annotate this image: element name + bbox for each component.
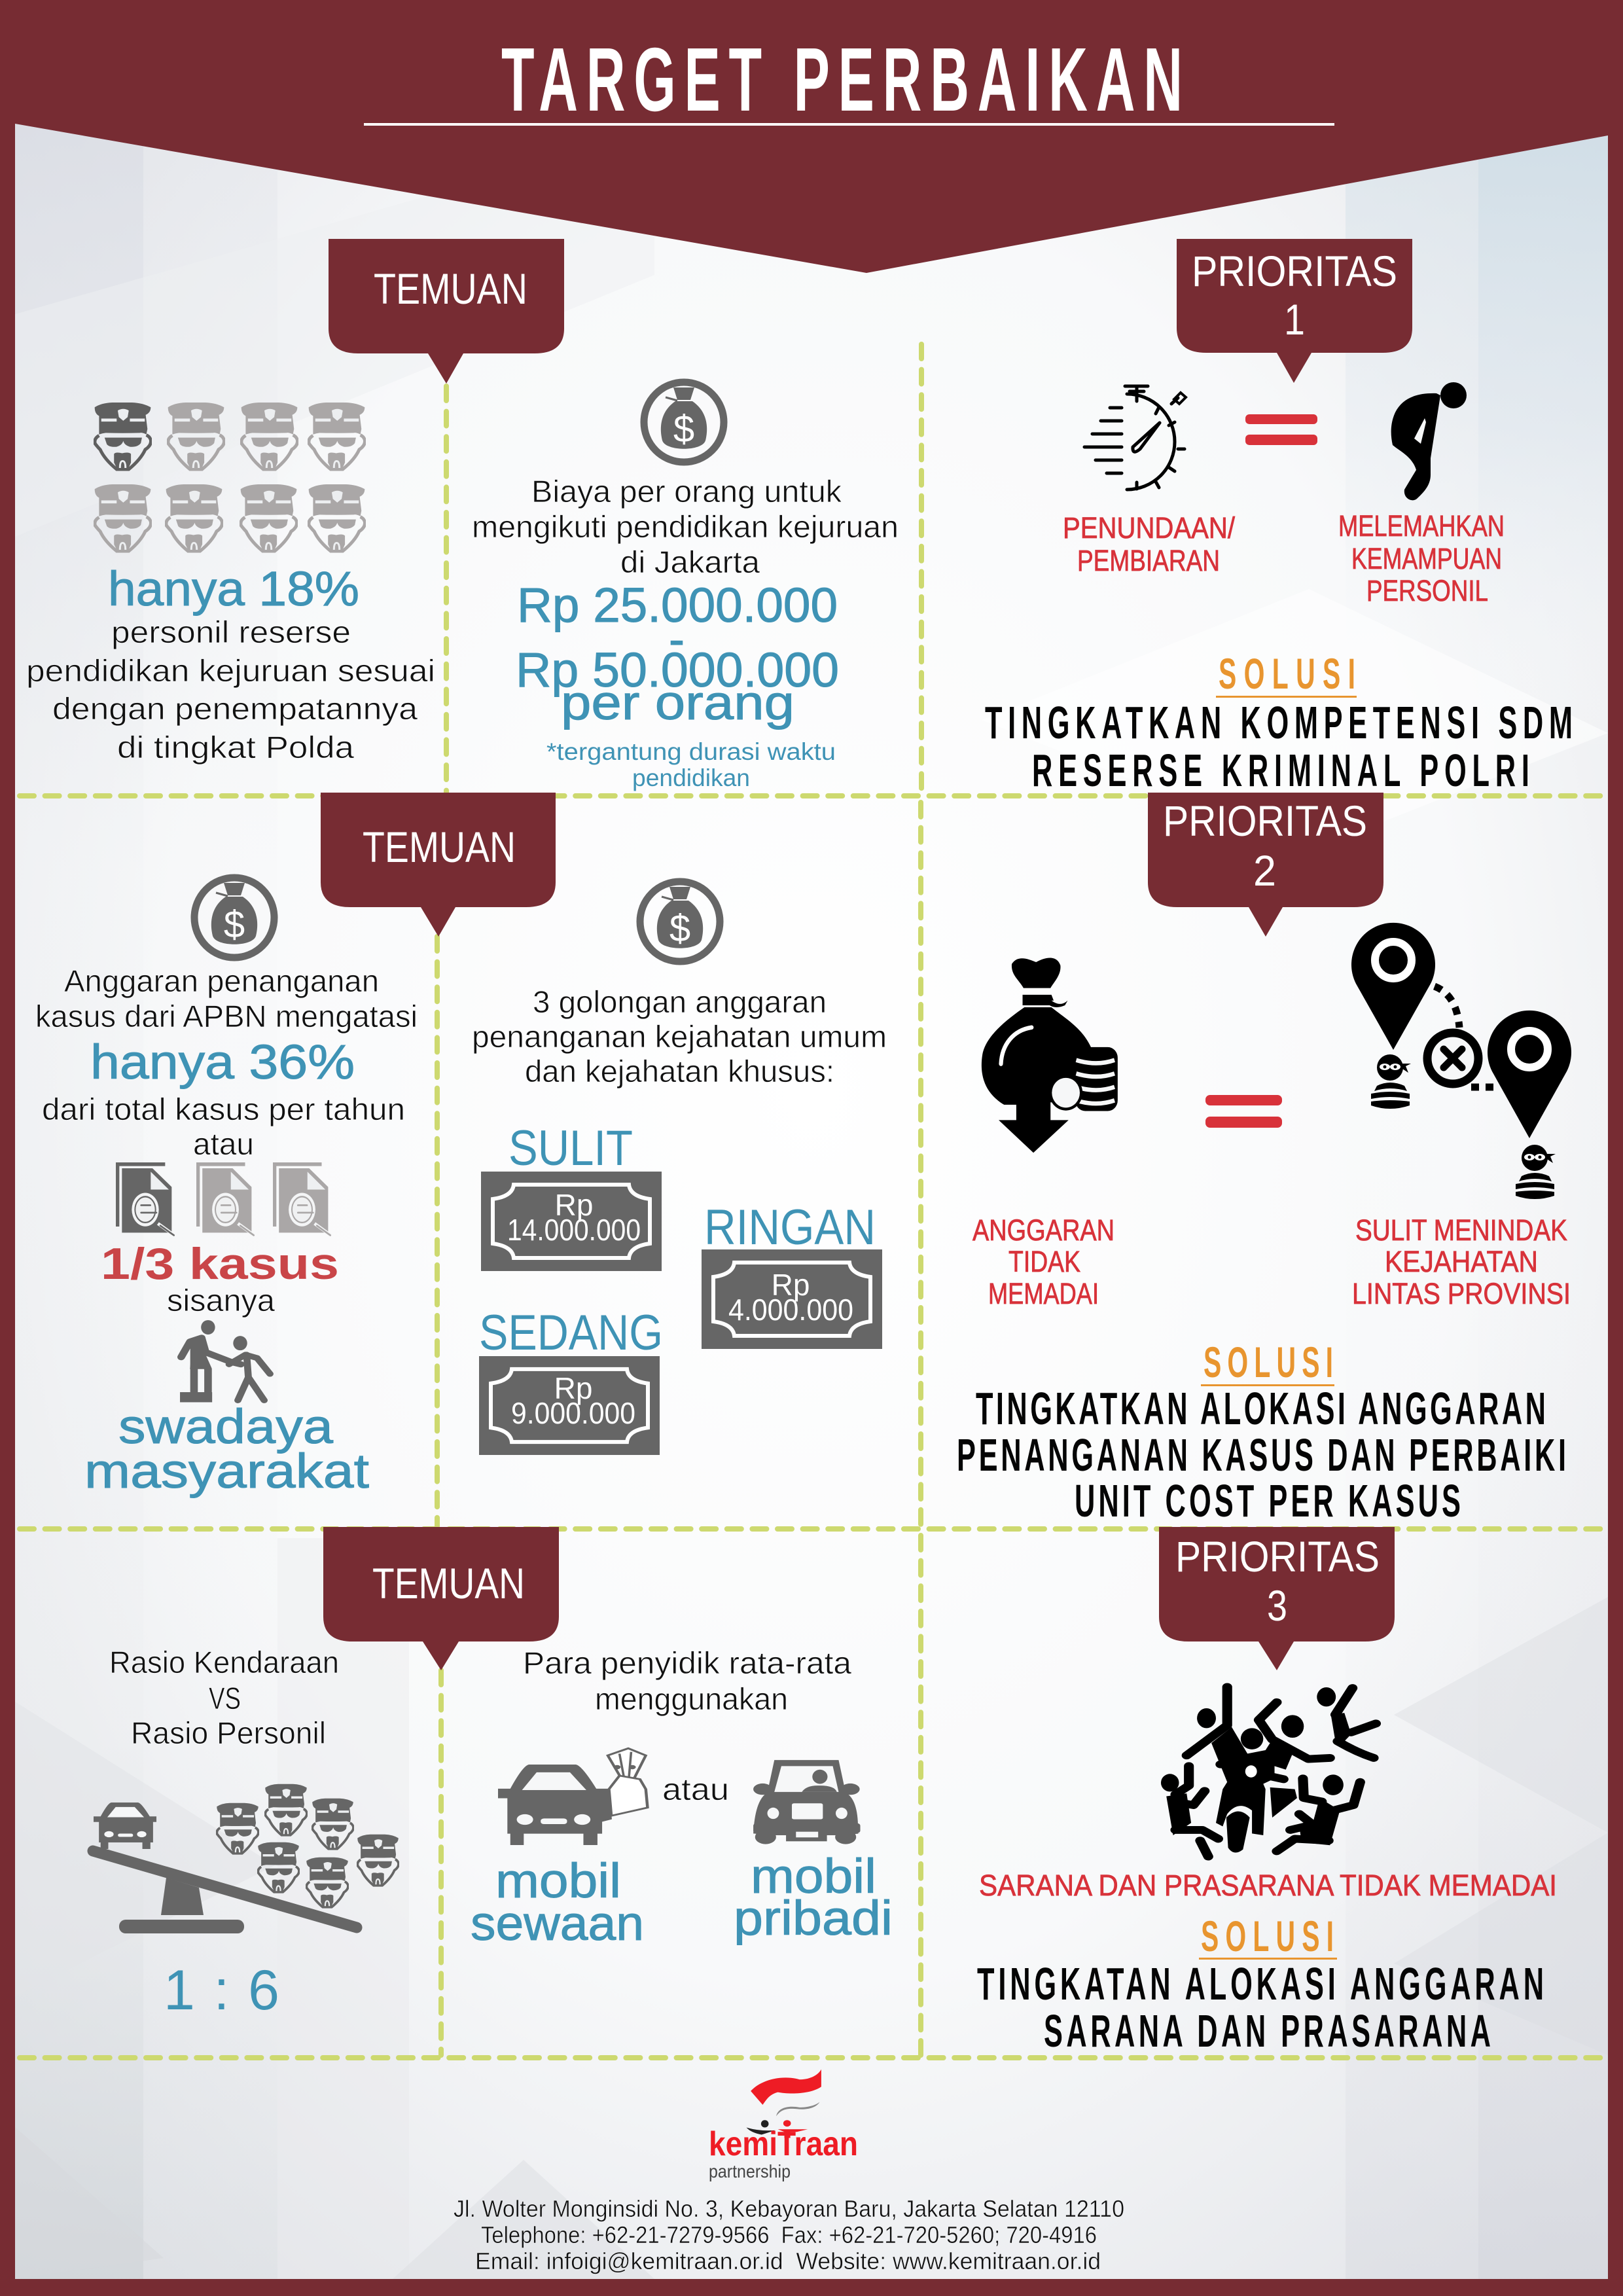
stat: cost range: Rp 25.000.000	[517, 578, 838, 632]
heading: solusi 2: SOLUSI	[1204, 1338, 1333, 1386]
text block: solusi 2: TINGKATKAN ALOKASI ANGGARAN	[976, 1383, 1546, 1435]
text block: solusi 2: UNIT COST PER KASUS	[1075, 1475, 1461, 1527]
budget: ringan: RINGAN	[704, 1200, 876, 1255]
heading: prioritas 3	[1159, 1527, 1395, 1670]
icon: money bag	[644, 382, 724, 462]
stat: hanya 36%: hanya 36%	[90, 1035, 355, 1089]
text block: 3 golongan: dan kejahatan khusus:	[525, 1054, 834, 1088]
text block: solusi 1	[985, 697, 1573, 797]
footer: contact information: Telephone: +62-21-7279-9566 Fax: +62-21-720-5260; 720-4916	[481, 2221, 1097, 2248]
label: mobil sewaan: mobil	[495, 1854, 621, 1908]
heading: prioritas 2: 2	[1253, 846, 1276, 895]
budget: sedang: 9.000.000	[511, 1396, 635, 1430]
icon: equals sign	[1205, 1095, 1282, 1128]
icon: money bag: $	[673, 408, 694, 450]
text: atau: atau	[662, 1772, 729, 1806]
stat: cost range: -	[669, 612, 685, 666]
text block: personil reserse	[26, 615, 435, 764]
stat: swadaya masyarakat	[84, 1399, 369, 1498]
label: anggaran tidak memadai	[972, 1213, 1115, 1310]
stat: cost range: Rp 50.000.000	[516, 643, 839, 697]
heading: temuan 1: TEMUAN	[374, 264, 527, 313]
budget: ringan	[702, 1200, 882, 1349]
label: mobil sewaan	[471, 1854, 644, 1950]
budget: sulit: 14.000.000	[507, 1213, 641, 1247]
text block: personil reserse: dengan penempatannya	[52, 691, 418, 726]
budget: sedang: Rp	[554, 1371, 592, 1405]
icon: rented car with money	[498, 1748, 647, 1845]
icon: people helping	[180, 1320, 270, 1402]
text block: solusi 2	[957, 1383, 1566, 1527]
stat: cost range: per orang	[561, 675, 794, 730]
text block: solusi 3	[977, 1958, 1544, 2057]
footer: contact information	[454, 2195, 1124, 2274]
text block: biaya per orang	[472, 474, 899, 579]
footnote: durasi: pendidikan	[632, 764, 750, 791]
heading: prioritas 1: 1	[1284, 295, 1305, 344]
label: sulit menindak: KEJAHATAN	[1385, 1245, 1538, 1278]
panel: prioritas 2	[957, 793, 1571, 1527]
text block: para penyidik: Para penyidik rata-rata	[523, 1645, 852, 1680]
text block: dari total kasus: atau	[193, 1126, 254, 1161]
budget: sedang: SEDANG	[479, 1305, 663, 1361]
label: anggaran tidak memadai: MEMADAI	[988, 1277, 1099, 1310]
icon: stopwatch	[1084, 386, 1186, 490]
text block: biaya per orang: mengikuti pendidikan kejuruan	[472, 509, 899, 544]
text block: biaya per orang: Biaya per orang untuk	[531, 474, 842, 509]
panel: temuan 2	[35, 793, 887, 1498]
text block: solusi 3: TINGKATAN ALOKASI ANGGARAN	[977, 1958, 1544, 2010]
text block: rasio: VS	[209, 1681, 241, 1715]
label: sarana prasarana: SARANA DAN PRASARANA TIDAK MEMADAI	[979, 1869, 1557, 1902]
icon: weak person	[1391, 382, 1467, 500]
label: anggaran tidak memadai: ANGGARAN	[972, 1213, 1115, 1247]
heading: solusi 1: SOLUSI	[1219, 649, 1355, 698]
label: mobil pribadi: pribadi	[734, 1891, 893, 1945]
label: mobil sewaan: sewaan	[471, 1896, 644, 1950]
text block: personil reserse: pendidikan kejuruan sesuai	[26, 653, 435, 688]
budget: ringan: Rp	[772, 1268, 810, 1302]
text block: rasio	[109, 1645, 339, 1750]
label: sulit menindak: LINTAS PROVINSI	[1352, 1277, 1571, 1310]
label: mobil pribadi: mobil	[751, 1849, 876, 1903]
heading: prioritas 1: PRIORITAS	[1192, 247, 1397, 295]
icon: equals sign	[1245, 414, 1317, 445]
icon: crowded people on motorcycle	[1161, 1687, 1376, 1857]
label: melemahkan: MELEMAHKAN	[1338, 509, 1505, 543]
text block: dari total kasus: dari total kasus per tahun	[42, 1092, 405, 1126]
text block: rasio: Rasio Personil	[131, 1715, 326, 1750]
icon: private car	[753, 1760, 860, 1844]
text block: para penyidik	[523, 1645, 852, 1716]
panel: prioritas 1	[985, 239, 1573, 797]
title: TARGET PERBAIKAN	[501, 29, 1183, 130]
heading: prioritas 2: PRIORITAS	[1163, 797, 1367, 845]
panel: prioritas 3	[977, 1527, 1557, 2057]
panel: temuan 1	[26, 239, 899, 791]
text block: solusi 1: TINGKATKAN KOMPETENSI SDM	[985, 697, 1573, 749]
heading: solusi 3: SOLUSI	[1201, 1912, 1334, 1960]
text block: dari total kasus	[42, 1092, 405, 1161]
icon: map pins, thieves and crossing	[1351, 923, 1571, 1199]
text block: solusi 3: SARANA DAN PRASARANA	[1044, 2005, 1491, 2057]
stat: swadaya masyarakat: masyarakat	[84, 1444, 369, 1498]
text block: 3 golongan: penanganan kejahatan umum	[472, 1019, 887, 1054]
heading: temuan 3	[323, 1527, 559, 1670]
budget: ringan: 4.000.000	[728, 1293, 853, 1327]
heading: temuan 1	[329, 239, 564, 384]
icon: money bag down	[982, 958, 1118, 1153]
budget: sulit	[481, 1121, 662, 1271]
icon: police personnel grid	[95, 403, 365, 552]
panel: temuan 3	[93, 1527, 893, 2022]
heading: temuan 2: TEMUAN	[363, 823, 516, 871]
label: penundaan: PENUNDAAN/	[1063, 511, 1235, 545]
icon: money bag	[194, 878, 274, 958]
text block: 3 golongan	[472, 984, 887, 1088]
icon: case documents	[116, 1162, 330, 1235]
footnote: durasi	[546, 738, 836, 791]
stat: hanya 18%: hanya 18%	[108, 562, 359, 616]
icon: seesaw with car and police	[93, 1784, 399, 1933]
text block: solusi 1: RESERSE KRIMINAL POLRI	[1032, 745, 1529, 797]
text block: personil reserse: personil reserse	[111, 615, 351, 649]
label: mobil pribadi	[734, 1849, 893, 1945]
label: penundaan	[1063, 511, 1235, 577]
stat: swadaya masyarakat: swadaya	[118, 1399, 334, 1454]
text block: personil reserse: di tingkat Polda	[117, 730, 355, 764]
footer: contact information: Jl. Wolter Monginsidi No. 3, Kebayoran Baru, Jakarta Selatan 12110	[454, 2195, 1124, 2222]
heading: prioritas 2	[1148, 793, 1383, 937]
label: melemahkan	[1338, 509, 1505, 607]
text block: biaya per orang: di Jakarta	[620, 545, 760, 579]
stat: cost range	[516, 578, 839, 730]
logo: kemitraan: kemiTraan	[709, 2125, 858, 2163]
stat: 1/3 kasus: 1/3 kasus	[101, 1239, 339, 1289]
text block: anggaran: kasus dari APBN mengatasi	[35, 999, 418, 1033]
icon: money bag: $	[669, 907, 690, 950]
budget: sedang	[479, 1305, 663, 1455]
icon: money bag: $	[224, 903, 245, 946]
text block: anggaran: Anggaran penanganan	[64, 963, 379, 998]
text block: para penyidik: menggunakan	[595, 1681, 788, 1716]
label: sulit menindak: SULIT MENINDAK	[1355, 1213, 1567, 1247]
label: anggaran tidak memadai: TIDAK	[1008, 1245, 1080, 1278]
logo: kemitraan: partnership	[709, 2161, 791, 2181]
logo: kemitraan	[709, 2070, 858, 2181]
label: penundaan: PEMBIARAN	[1077, 544, 1220, 577]
budget: sulit: SULIT	[508, 1121, 633, 1176]
heading: prioritas 3: PRIORITAS	[1175, 1532, 1380, 1581]
label: melemahkan: KEMAMPUAN	[1351, 542, 1502, 575]
stat: 1 : 6: 1 : 6	[164, 1959, 279, 2022]
text block: anggaran	[35, 963, 418, 1033]
label: sulit menindak	[1352, 1213, 1571, 1310]
label: melemahkan: PERSONIL	[1366, 574, 1488, 607]
heading: temuan 3: TEMUAN	[372, 1559, 525, 1607]
footer: contact information: Email: infoigi@kemitraan.or.id Website: www.kemitraan.or.id	[475, 2248, 1101, 2274]
text block: solusi 2: PENANGANAN KASUS DAN PERBAIKI	[957, 1429, 1566, 1481]
text: sisanya: sisanya	[167, 1283, 276, 1318]
budget: sulit: Rp	[555, 1188, 593, 1222]
text block: 3 golongan: 3 golongan anggaran	[533, 984, 827, 1019]
heading: prioritas 1	[1177, 239, 1412, 383]
heading: temuan 2	[321, 793, 556, 937]
footnote: durasi: *tergantung durasi waktu	[546, 738, 836, 765]
text block: rasio: Rasio Kendaraan	[109, 1645, 339, 1679]
heading: prioritas 3: 3	[1267, 1581, 1287, 1630]
icon: money bag	[640, 882, 720, 961]
